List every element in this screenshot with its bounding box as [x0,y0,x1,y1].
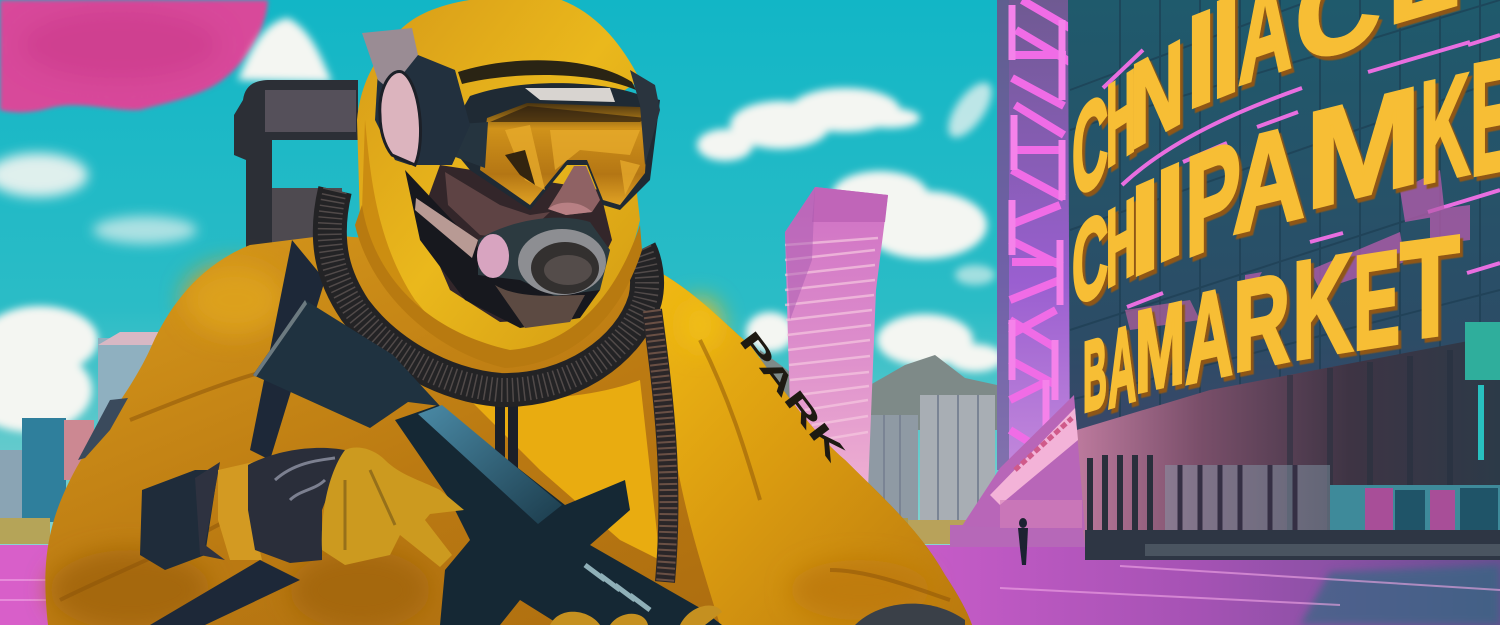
gloved fingers at grip [550,606,722,625]
sign line two: I [1155,133,1185,292]
yellow glove hand [322,447,464,567]
white clouds [0,18,1003,432]
sign line three: A [1185,261,1233,411]
sleeve lettering: PARK [733,325,851,467]
sign line three: R [1233,244,1290,400]
knit cuff [218,460,262,560]
black wrist band [140,470,218,570]
sign line two: A [1232,95,1305,263]
ground plaza [0,518,1500,625]
rifle body [395,405,722,625]
neon pillar [997,0,1070,470]
rifle rail [585,565,650,610]
respirator strap [415,198,478,258]
goggle lens [480,103,648,205]
sign line two: P [1185,108,1241,289]
sign line three: K [1292,223,1353,390]
operative in yellow suit [45,0,972,625]
distant grey buildings [868,395,1000,544]
sign line two [1072,24,1500,332]
sign line one: N [1130,12,1184,175]
side hose [652,310,668,582]
shoulder patch [78,398,128,460]
sign line three: B [1083,315,1107,433]
jacket fold shadows [60,340,950,600]
sign line three: A [1108,303,1136,432]
face [420,165,612,322]
sign line three [1083,205,1460,433]
beard and neck [405,170,600,328]
harness straps [150,240,325,625]
goggle strap clip [447,122,488,168]
pink facade panels [1245,170,1470,290]
goggles frame [445,83,660,210]
sign line three: E [1353,222,1400,379]
market building upper facade [1068,0,1500,480]
chair behind figure [234,80,358,250]
hood shading [362,120,440,330]
sign line three: M [1135,276,1185,418]
left skyline [0,332,158,544]
headphone [375,55,470,165]
nose [548,166,600,215]
hood top stripe [458,60,636,90]
rifle barrel highlight [418,405,562,524]
leather glove cuff [248,448,345,563]
distant figure [1018,518,1028,565]
cuff at elbow [855,604,965,625]
sign line two: C [1072,186,1108,332]
market building lower storefront [1070,322,1500,560]
small pink sign and entrance [962,395,1085,530]
pink twisted tower [785,187,888,490]
breathing hose [330,190,647,390]
sign line three: T [1400,205,1460,370]
jacket body [45,235,972,625]
pink cloud [0,0,268,112]
market sign letters [1072,0,1500,433]
hood lower band [355,205,642,368]
sign line one: C [1072,64,1108,227]
neon strips on facade [1103,35,1500,307]
sign line two: K [1420,43,1470,216]
right goggle mount [630,70,660,165]
bright chest and right arm [640,262,972,625]
sign line one [1072,0,1460,227]
respirator mask [478,218,610,296]
hood [357,0,640,362]
rifle stock [253,300,440,428]
sign line two: M [1305,56,1422,239]
sign line one: H [1106,43,1136,193]
sign line two: I [1130,150,1160,306]
mountains [760,350,997,430]
sign line two: H [1106,174,1136,311]
jacket shading [50,265,930,625]
